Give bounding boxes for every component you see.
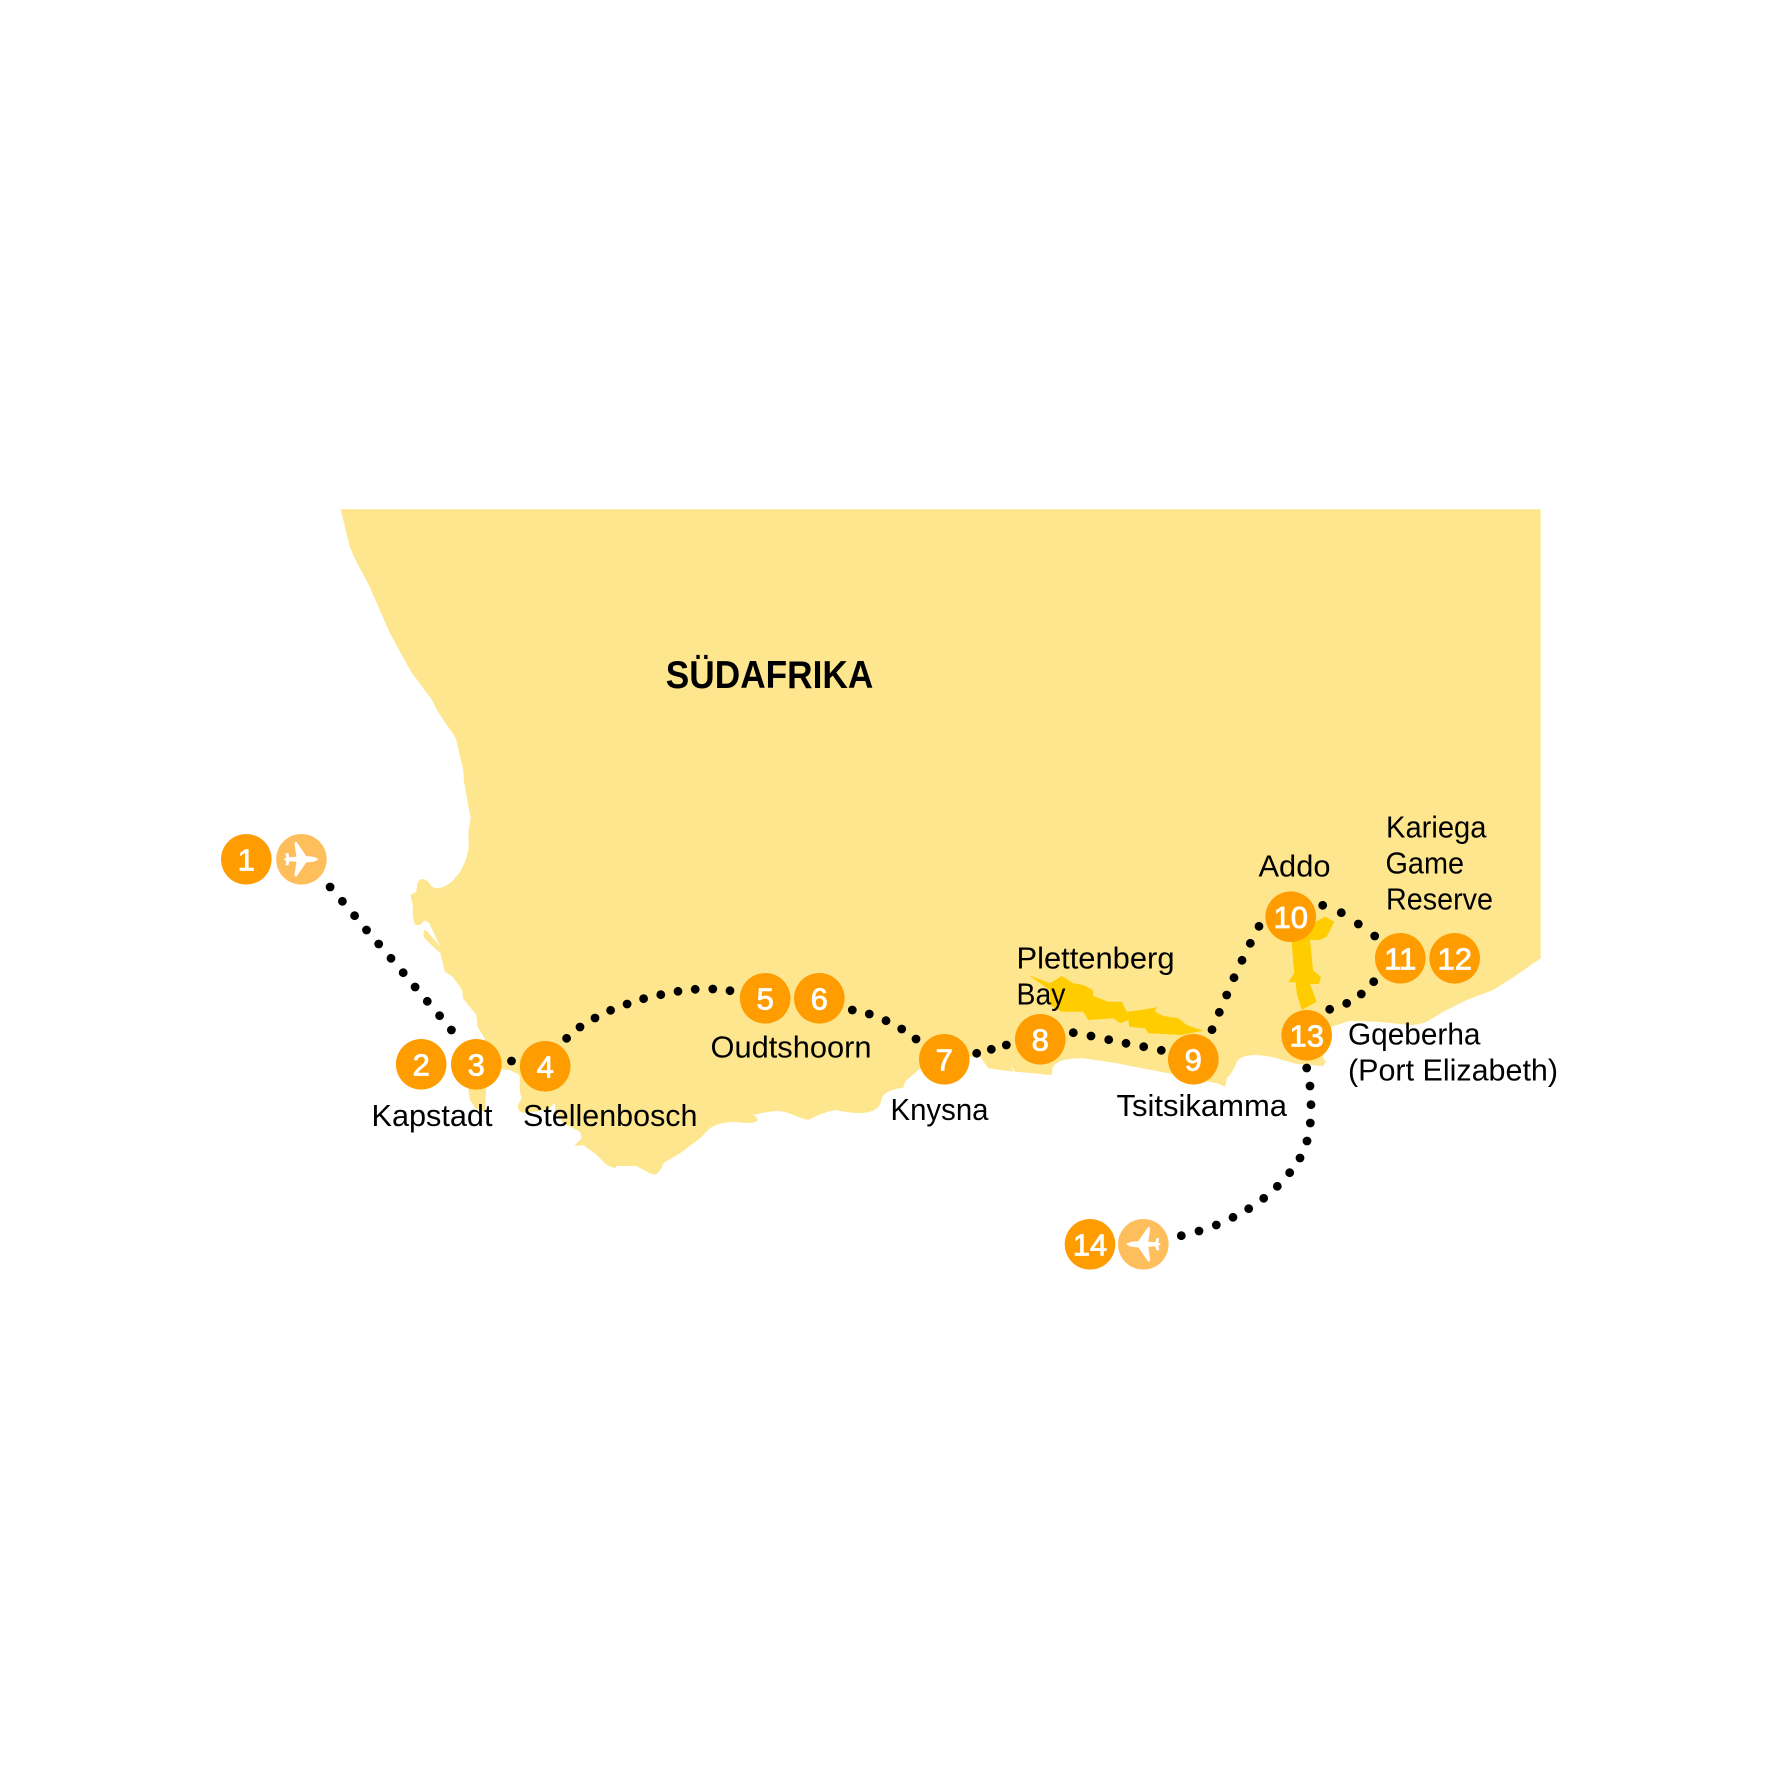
icon: plane departure <box>276 834 327 885</box>
stop 7: 7 <box>936 1042 953 1078</box>
stop 7 <box>919 1034 970 1085</box>
stop 8: 8 <box>1032 1022 1049 1058</box>
label: Kariega Game Reserve: Reserve <box>1386 882 1493 916</box>
label: Kariega Game Reserve: Kariega <box>1386 810 1487 844</box>
label: Tsitsikamma: Tsitsikamma <box>1116 1088 1288 1123</box>
stop 8 <box>1015 1014 1066 1065</box>
label: Kapstadt: Kapstadt <box>372 1098 493 1133</box>
land: South Africa <box>341 509 1541 1174</box>
label: Plettenberg Bay <box>1016 940 1174 1012</box>
stop 12: 12 <box>1437 942 1472 976</box>
stop 1 <box>221 834 272 885</box>
stop 14: 14 <box>1073 1228 1107 1262</box>
stop 5 <box>740 973 790 1024</box>
region: Garden Route highlight <box>1028 975 1203 1035</box>
label: Oudtshoorn: Oudtshoorn <box>710 1030 872 1064</box>
region: Addo highlight <box>1288 917 1334 1010</box>
label: Kariega Game Reserve <box>1386 810 1493 916</box>
country label: SÜDAFRIKA <box>666 654 873 697</box>
dotted route <box>326 883 1379 1240</box>
stop 4: 4 <box>537 1050 554 1084</box>
stop 4 <box>520 1041 570 1092</box>
stop 2 <box>396 1039 447 1090</box>
stop 6: 6 <box>811 982 828 1016</box>
stop 6 <box>794 973 845 1024</box>
label: Plettenberg Bay: Plettenberg <box>1016 940 1174 976</box>
stop 9 <box>1168 1034 1219 1085</box>
stop 11 <box>1375 933 1426 984</box>
label: Stellenbosch: Stellenbosch <box>523 1098 698 1133</box>
stop 13: 13 <box>1289 1018 1324 1054</box>
stop 10: 10 <box>1273 900 1308 935</box>
label: Gqeberha (Port Elizabeth): (Port Elizabeth) <box>1348 1052 1558 1088</box>
stop 3: 3 <box>468 1048 485 1082</box>
stop 12 <box>1429 933 1480 984</box>
stop 5: 5 <box>757 982 774 1016</box>
stop 11: 11 <box>1384 942 1416 976</box>
stop 1: 1 <box>238 842 255 878</box>
stop 14 <box>1065 1219 1115 1270</box>
stop 9: 9 <box>1185 1042 1202 1078</box>
label: Plettenberg Bay: Bay <box>1016 976 1066 1012</box>
label: Gqeberha (Port Elizabeth): Gqeberha <box>1348 1016 1481 1052</box>
stop 10 <box>1265 891 1316 942</box>
label: Addo: Addo <box>1258 848 1330 884</box>
stop 13 <box>1281 1010 1332 1061</box>
stop 3 <box>451 1039 502 1090</box>
label: Knysna: Knysna <box>890 1092 989 1127</box>
label: Kariega Game Reserve: Game <box>1386 846 1464 880</box>
label: Gqeberha (Port Elizabeth) <box>1348 1016 1558 1088</box>
stop 2: 2 <box>413 1048 430 1082</box>
icon: plane return <box>1118 1219 1169 1270</box>
